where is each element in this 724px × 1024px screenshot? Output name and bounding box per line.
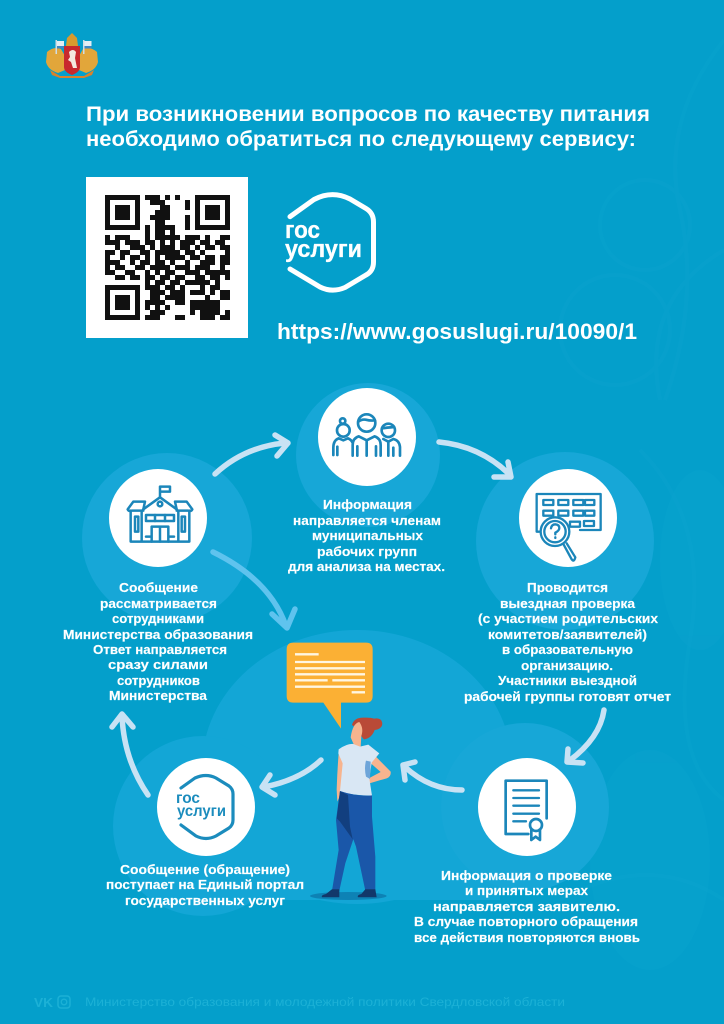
arrow: group to inspection: [439, 442, 511, 477]
title: необходимо обратиться по следующему сервису:: [86, 128, 636, 151]
step text: inspection: в образовательную: [502, 643, 633, 657]
step text: portal: государственных услуг: [125, 894, 285, 908]
gosuslugi logo small: [176, 776, 233, 838]
step text: inspection: (с участием родительских: [478, 612, 658, 626]
website url: https://www.gosuslugi.ru/10090/1: [277, 319, 637, 344]
arrow: certificate to person: [403, 762, 462, 790]
step text: inspection: рабочей группы готовят отчет: [464, 690, 671, 704]
icon: school building: [128, 487, 192, 542]
step text: inspection: Участники выездной: [498, 674, 637, 688]
step text: portal: [106, 863, 304, 908]
step text: group: Информация: [323, 498, 412, 512]
QR code: [86, 177, 248, 338]
white circles: [109, 388, 617, 856]
step text: portal: поступает на Единый портал: [106, 878, 304, 892]
step text: group: муниципальных: [312, 529, 423, 543]
step text: group: [288, 498, 445, 574]
step text: ministry: Ответ направляется: [93, 643, 227, 657]
step text: inspection: Проводится: [527, 581, 608, 595]
step text: ministry: сотрудниками: [112, 612, 204, 626]
gosuslugi logo: услуги: [285, 236, 362, 263]
title: [86, 103, 650, 151]
step text: reply: направляется заявителю.: [433, 900, 620, 914]
gosuslugi logo small: гос: [176, 790, 200, 807]
arrow: school to group: [215, 435, 288, 474]
arrow: portal to school: [112, 714, 148, 795]
icon: certificate document: [506, 781, 547, 840]
step text: ministry: [63, 581, 253, 703]
step text: ministry: сразу силами: [108, 658, 208, 672]
step text: portal: Сообщение (обращение): [120, 863, 290, 877]
footer text: Министерство образования и молодежной политики Свердловской области: [85, 995, 565, 1009]
step text: inspection: комитетов/заявителей): [488, 628, 647, 642]
step text: ministry: Министерства: [109, 689, 208, 703]
footer social icons: VK: [34, 995, 54, 1010]
icon: people group: [333, 414, 400, 456]
step text: inspection: организацию.: [521, 659, 613, 673]
step text: inspection: [464, 581, 671, 704]
step text: group: для анализа на местах.: [288, 560, 445, 574]
speech bubble: [287, 643, 373, 729]
person: [310, 718, 391, 900]
icon: inspection magnifier: [537, 494, 601, 561]
halo circles: [82, 383, 654, 891]
step text: reply: Информация о проверке: [441, 869, 612, 883]
step text: reply: [414, 869, 640, 945]
step text: ministry: Сообщение: [119, 581, 198, 595]
gosuslugi logo small: услуги: [177, 803, 226, 820]
emblem of Sverdlovsk region: [46, 33, 98, 78]
step text: inspection: выездная проверка: [500, 597, 636, 611]
gosuslugi logo: [285, 195, 374, 290]
arrow: school to person: [213, 552, 295, 628]
step text: reply: все действия повторяются вновь: [414, 931, 640, 945]
gosuslugi logo: гос: [285, 217, 320, 244]
title: При возникновении вопросов по качеству питания: [86, 103, 650, 126]
arrow: person to portal: [262, 760, 321, 795]
decorative cloud behind the person: [113, 630, 512, 916]
arrow: inspection to certificate: [567, 710, 604, 763]
footer social icons: [34, 995, 70, 1010]
step text: ministry: рассматривается: [100, 597, 217, 611]
step text: reply: В случае повторного обращения: [414, 915, 638, 929]
step text: ministry: Министерства образования: [63, 628, 253, 642]
step text: group: рабочих групп: [317, 545, 417, 559]
step text: reply: и принятых мерах: [465, 884, 588, 898]
step text: group: направляется членам: [293, 514, 441, 528]
step text: ministry: сотрудников: [117, 674, 200, 688]
